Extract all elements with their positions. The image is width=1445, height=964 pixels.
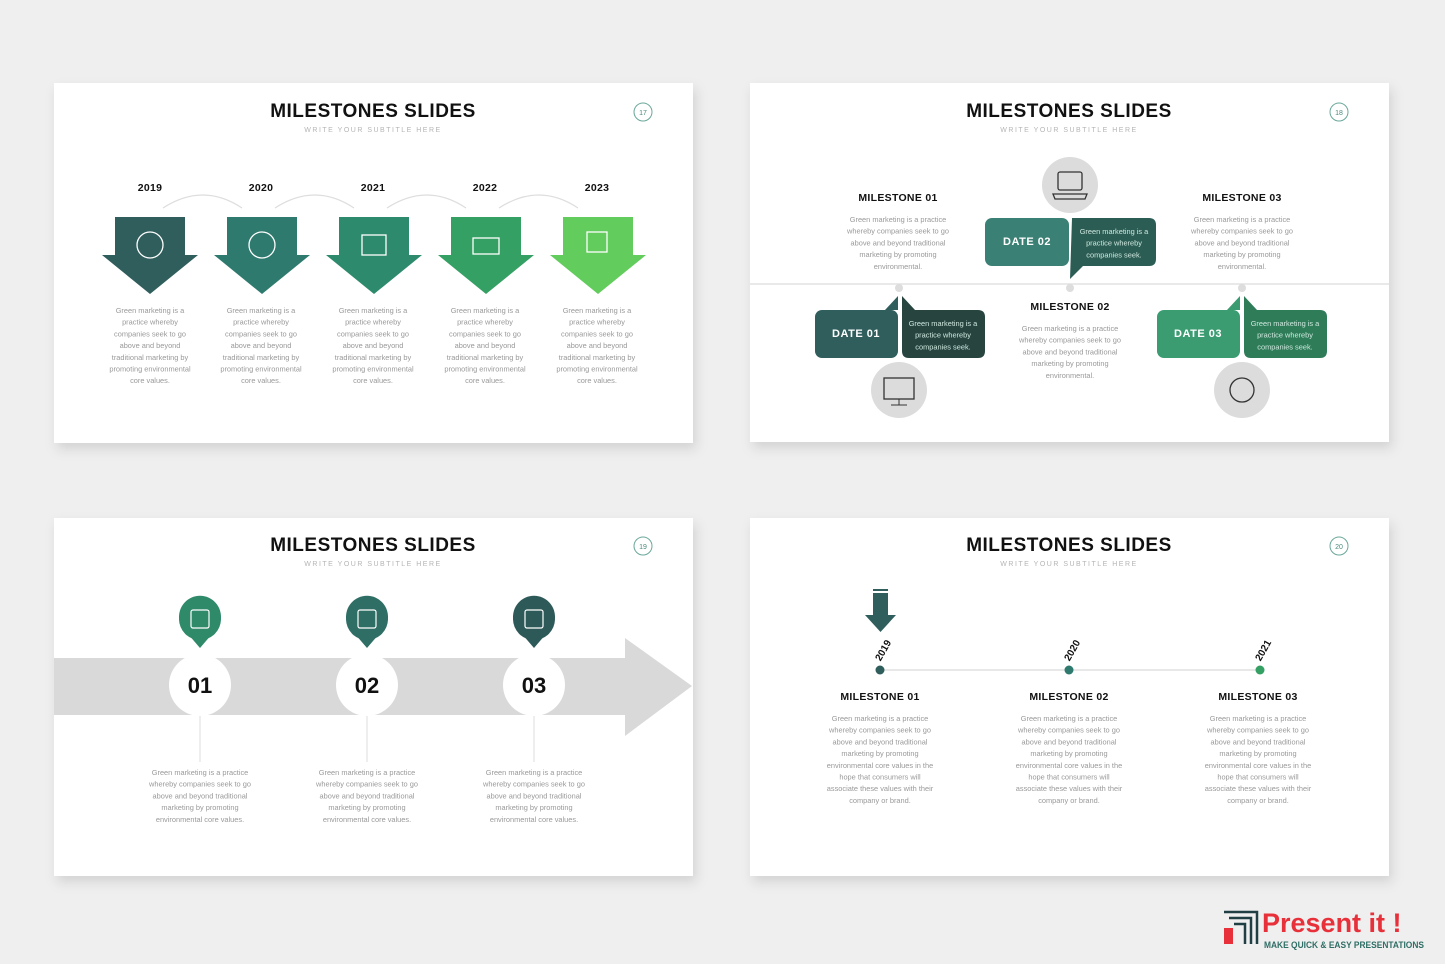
arrow 2023: core values. <box>577 376 617 385</box>
milestone 03: MILESTONE 03 <box>1218 691 1298 703</box>
title: MILESTONES SLIDES <box>966 101 1172 122</box>
milestone 03 text: above and beyond traditional <box>1195 238 1290 247</box>
arrow 2023: traditional marketing by <box>559 353 636 362</box>
arrow 2019: above and beyond <box>120 341 180 350</box>
arrow 2021: traditional marketing by <box>335 353 412 362</box>
milestone 03: marketing by promoting <box>1219 749 1297 758</box>
arrow 2019 <box>102 182 198 385</box>
arrow 2021: above and beyond <box>343 341 403 350</box>
step 01: marketing by promoting <box>161 803 239 812</box>
step 03: 03 <box>522 673 546 698</box>
milestone 01: environmental core values in the <box>827 761 933 770</box>
panel: slide 17 five-year arrows <box>54 83 693 443</box>
step 03: whereby companies seek to go <box>482 780 585 789</box>
milestone 02: MILESTONE 02 <box>1029 691 1109 703</box>
step 01: environmental core values. <box>156 815 244 824</box>
callout: date 03: Green marketing is a <box>1251 319 1320 328</box>
step 03: marketing by promoting <box>495 803 573 812</box>
callout: date 01: companies seek. <box>915 342 971 351</box>
title: MILESTONES SLIDES <box>270 101 476 122</box>
milestone 02 <box>1016 638 1123 805</box>
milestone 03 text: whereby companies seek to go <box>1190 227 1293 236</box>
page number: 19 <box>639 544 647 551</box>
icon: monitor circle <box>871 362 927 418</box>
panel: slide 19 arrow band <box>54 518 693 876</box>
arrow 2021: practice whereby <box>345 318 401 327</box>
callout: date 02: companies seek. <box>1086 250 1142 259</box>
milestone 01: associate these values with their <box>827 784 934 793</box>
panel: slide 18 date callouts <box>750 83 1389 442</box>
step 02: whereby companies seek to go <box>315 780 418 789</box>
arrow 2020: above and beyond <box>231 341 291 350</box>
callout: date 02 <box>985 218 1156 279</box>
milestone 02: marketing by promoting <box>1030 749 1108 758</box>
milestone 01: 2019 <box>874 638 894 663</box>
subtitle: WRITE YOUR SUBTITLE HERE <box>1000 127 1138 134</box>
arrow 2021 <box>326 182 422 385</box>
arrow 2023: practice whereby <box>569 318 625 327</box>
callout: date 02: DATE 02 <box>1003 236 1051 248</box>
arrow 2023: above and beyond <box>567 341 627 350</box>
arrow 2022: above and beyond <box>455 341 515 350</box>
arrow 2022: promoting environmental <box>444 364 526 374</box>
milestone 02: above and beyond traditional <box>1022 737 1117 746</box>
arrow 2021: 2021 <box>361 182 385 194</box>
step 02 <box>315 596 418 824</box>
milestone 02: environmental core values in the <box>1016 761 1122 770</box>
milestone 03: associate these values with their <box>1205 784 1312 793</box>
step 02: 02 <box>355 673 379 698</box>
arrow 2019: core values. <box>130 376 170 385</box>
milestone 01: Green marketing is a practice <box>832 714 928 723</box>
arrow 2022 <box>438 182 534 385</box>
milestone 02 text: MILESTONE 02 <box>1030 301 1110 313</box>
arrow 2020: Green marketing is a <box>227 306 296 315</box>
arrow 2021: core values. <box>353 376 393 385</box>
arrow 2022: companies seek to go <box>449 329 521 338</box>
panel: slide 20 timeline <box>750 518 1389 876</box>
logo: Present it: Present it ! <box>1262 908 1402 938</box>
arrow 2022: practice whereby <box>457 318 513 327</box>
milestone 03: hope that consumers will <box>1217 772 1299 782</box>
arrow: down marker <box>865 589 896 632</box>
callout: date 03: DATE 03 <box>1174 328 1222 340</box>
milestone 03: above and beyond traditional <box>1211 737 1306 746</box>
arrow 2019: companies seek to go <box>114 329 186 338</box>
step 03 <box>482 596 585 824</box>
milestone 03: 2021 <box>1254 638 1274 663</box>
milestone 01 text: whereby companies seek to go <box>846 227 949 236</box>
arrow 2020: core values. <box>241 376 281 385</box>
callout: date 01: Green marketing is a <box>909 319 978 328</box>
arrow 2023: Green marketing is a <box>563 306 632 315</box>
milestone 03 <box>1205 638 1312 805</box>
arrow 2022: core values. <box>465 376 505 385</box>
milestone 02 text: above and beyond traditional <box>1023 347 1118 356</box>
page number: 20 <box>1335 544 1343 551</box>
milestone 03 text: marketing by promoting <box>1203 250 1281 259</box>
arrow 2023: companies seek to go <box>561 329 633 338</box>
logo: Present it <box>1224 908 1424 951</box>
title: MILESTONES SLIDES <box>270 535 476 556</box>
callout: date 02: practice whereby <box>1086 239 1142 248</box>
milestone 02 text: marketing by promoting <box>1031 359 1109 368</box>
milestone 01: MILESTONE 01 <box>840 691 920 703</box>
step 02: marketing by promoting <box>328 803 406 812</box>
milestone 01 text <box>846 192 949 271</box>
arrow 2019: practice whereby <box>122 318 178 327</box>
page number <box>1330 103 1348 121</box>
subtitle: WRITE YOUR SUBTITLE HERE <box>304 127 442 134</box>
arrow 2020: 2020 <box>249 182 273 194</box>
milestone 01 text: marketing by promoting <box>859 250 937 259</box>
arrow 2021: promoting environmental <box>332 364 414 374</box>
milestone 01: whereby companies seek to go <box>828 726 931 735</box>
step 03: above and beyond traditional <box>487 791 582 800</box>
callout: date 02: Green marketing is a <box>1080 227 1149 236</box>
subtitle: WRITE YOUR SUBTITLE HERE <box>1000 561 1138 568</box>
callout: date 03: companies seek. <box>1257 342 1313 351</box>
milestone 02 text: whereby companies seek to go <box>1018 336 1121 345</box>
milestone 01: marketing by promoting <box>841 749 919 758</box>
arrow 2022: traditional marketing by <box>447 353 524 362</box>
arrow 2022: Green marketing is a <box>451 306 520 315</box>
page number: 18 <box>1335 110 1343 117</box>
page number <box>1330 537 1348 555</box>
arrow band <box>54 638 692 736</box>
icon: tools circle <box>1214 362 1270 418</box>
milestone 01: above and beyond traditional <box>833 737 928 746</box>
callout: date 01: practice whereby <box>915 331 971 340</box>
milestone 03 text: environmental. <box>1218 262 1266 271</box>
milestone 01: company or brand. <box>849 796 911 805</box>
callout: date 01: DATE 01 <box>832 328 880 340</box>
arrow 2021: companies seek to go <box>337 329 409 338</box>
milestone 02 text: Green marketing is a practice <box>1022 324 1118 333</box>
milestone 02: 2020 <box>1063 638 1083 663</box>
step 02: above and beyond traditional <box>320 791 415 800</box>
milestone 02: whereby companies seek to go <box>1017 726 1120 735</box>
arrow 2020: companies seek to go <box>225 329 297 338</box>
step 01: above and beyond traditional <box>153 791 248 800</box>
step 03: environmental core values. <box>490 815 578 824</box>
arrow 2022: 2022 <box>473 182 497 194</box>
milestone 02 text <box>1018 301 1121 380</box>
arrow 2021: Green marketing is a <box>339 306 408 315</box>
arrow 2019: promoting environmental <box>109 364 191 374</box>
milestone 03 text: Green marketing is a practice <box>1194 215 1290 224</box>
icon: laptop circle <box>1042 157 1098 213</box>
step 02: environmental core values. <box>323 815 411 824</box>
milestone 02: associate these values with their <box>1016 784 1123 793</box>
milestone 03 text <box>1190 192 1293 271</box>
step 02: Green marketing is a practice <box>319 768 415 777</box>
arrow 2020: promoting environmental <box>220 364 302 374</box>
milestone 02: company or brand. <box>1038 796 1100 805</box>
page number <box>634 537 652 555</box>
milestone 03: Green marketing is a practice <box>1210 714 1306 723</box>
step 01: whereby companies seek to go <box>148 780 251 789</box>
subtitle: WRITE YOUR SUBTITLE HERE <box>304 561 442 568</box>
milestone 01: hope that consumers will <box>839 772 921 782</box>
milestone 03: company or brand. <box>1227 796 1289 805</box>
callout: date 01 <box>815 296 985 358</box>
step 01: Green marketing is a practice <box>152 768 248 777</box>
milestone 01 text: above and beyond traditional <box>851 238 946 247</box>
callout: date 03: practice whereby <box>1257 331 1313 340</box>
milestone 03 text: MILESTONE 03 <box>1202 192 1282 204</box>
milestone 01 text: MILESTONE 01 <box>858 192 938 204</box>
step 03: Green marketing is a practice <box>486 768 582 777</box>
arrow 2019: 2019 <box>138 182 162 194</box>
page number: 17 <box>639 110 647 117</box>
arrow 2019: Green marketing is a <box>116 306 185 315</box>
milestone 01 text: Green marketing is a practice <box>850 215 946 224</box>
page number <box>634 103 652 121</box>
step 01 <box>148 596 251 824</box>
step 01: 01 <box>188 673 212 698</box>
arrow 2020 <box>214 182 310 385</box>
milestone 02: Green marketing is a practice <box>1021 714 1117 723</box>
arrow 2019: traditional marketing by <box>112 353 189 362</box>
connector arcs <box>163 195 578 208</box>
title: MILESTONES SLIDES <box>966 535 1172 556</box>
arrow 2023 <box>550 182 646 385</box>
milestone 01 text: environmental. <box>874 262 922 271</box>
arrow 2023: promoting environmental <box>556 364 638 374</box>
milestone 02 text: environmental. <box>1046 371 1094 380</box>
callout: date 03 <box>1157 296 1327 358</box>
arrow 2023: 2023 <box>585 182 609 194</box>
logo: Present it: MAKE QUICK & EASY PRESENTATIONS <box>1264 940 1424 951</box>
milestone 01 <box>827 638 934 805</box>
arrow 2020: practice whereby <box>233 318 289 327</box>
milestone 03: whereby companies seek to go <box>1206 726 1309 735</box>
arrow 2020: traditional marketing by <box>223 353 300 362</box>
milestone 03: environmental core values in the <box>1205 761 1311 770</box>
milestone 02: hope that consumers will <box>1028 772 1110 782</box>
